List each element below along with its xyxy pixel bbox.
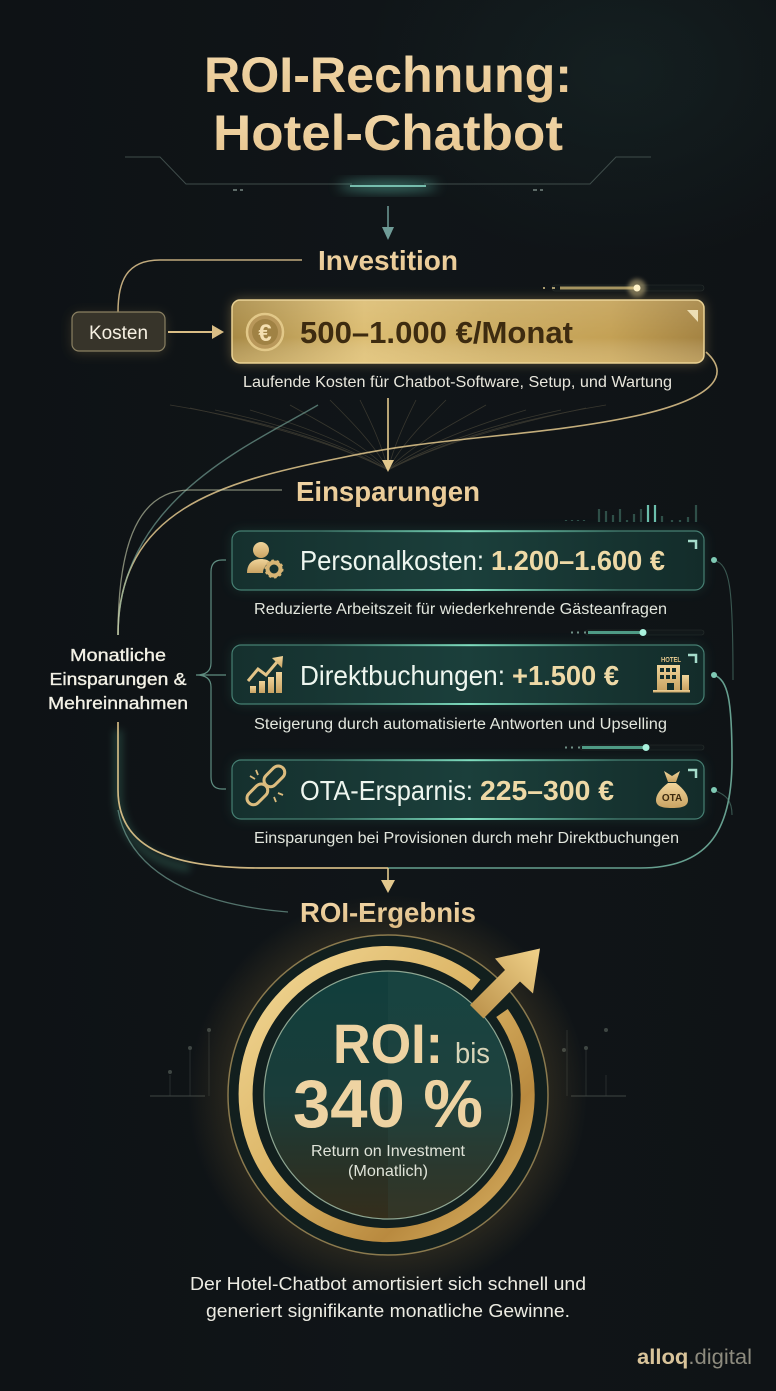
- flow curves: gold and teal: [118, 352, 733, 912]
- description: OTA: Einsparungen bei Provisionen durch mehr Direktbuchungen: [254, 830, 679, 847]
- ROI text: [293, 1012, 490, 1142]
- side label: [48, 645, 188, 713]
- description: Direktbuchungen: Steigerung durch automatisierte Antworten und Upselling: [254, 716, 667, 733]
- connector: kosten to investition heading: [118, 260, 302, 312]
- growth arrow: [470, 948, 540, 1018]
- card text: [300, 775, 614, 806]
- brand logo: alloq.digital: [637, 1346, 752, 1369]
- title: Hotel-Chatbot: [213, 105, 563, 161]
- title: [204, 47, 572, 161]
- mini bar sparkline: [566, 505, 696, 522]
- side label: Monatliche: [70, 645, 166, 665]
- card text: 225–300 €: [480, 775, 614, 806]
- title: ROI-Rechnung:: [204, 47, 572, 103]
- heading: Einsparungen: Einsparungen: [296, 476, 480, 507]
- side label: Einsparungen &: [50, 669, 187, 689]
- arrow: to ROI result: [381, 868, 395, 893]
- ROI caption: Return on Investment: [311, 1143, 466, 1160]
- card text: Direktbuchungen:: [300, 660, 505, 691]
- gold ring with gap: [246, 953, 528, 1235]
- card text: Personalkosten:: [300, 545, 484, 576]
- icon: person with gear: [247, 542, 282, 578]
- heading: Investition: Investition: [318, 245, 458, 276]
- cost description: Laufende Kosten für Chatbot-Software, Setup, und Wartung: [243, 374, 672, 391]
- ROI text: 340 %: [293, 1066, 483, 1142]
- fan of light rays: [170, 400, 606, 470]
- title divider ornament: [125, 157, 651, 191]
- arrow: investition to einsparungen: [382, 398, 394, 472]
- bracket connecting cards: [196, 560, 226, 789]
- side label: Mehreinnahmen: [48, 693, 188, 713]
- progress line: OTA: [565, 744, 704, 751]
- card text: OTA-Ersparnis:: [300, 775, 473, 806]
- panel: Direktbuchungen: [232, 644, 704, 705]
- conclusion text: Der Hotel-Chatbot amortisiert sich schnell und: [190, 1274, 586, 1294]
- arrow: title to investition: [382, 206, 394, 240]
- arrow: kosten to cost box: [168, 325, 224, 339]
- icon: money bag: OTA: [662, 793, 682, 804]
- icon: hotel: HOTEL: [661, 657, 682, 664]
- icon: euro coin: [247, 314, 283, 350]
- panel: Personalkosten: [232, 530, 704, 591]
- ROI text: ROI:: [333, 1012, 443, 1075]
- progress line: Direktbuchungen: [571, 629, 704, 636]
- icon: hotel: [653, 657, 690, 692]
- card text: [300, 660, 619, 691]
- cost value: 500–1.000 €/Monat: [300, 315, 573, 350]
- conclusion text: generiert signifikante monatliche Gewinne.: [206, 1301, 570, 1321]
- icon: euro coin: €: [258, 320, 272, 347]
- card text: +1.500 €: [512, 660, 619, 691]
- icon: money bag: [656, 771, 688, 808]
- label box: Kosten: Kosten: [89, 323, 148, 344]
- progress line: investition: [543, 279, 704, 297]
- conclusion text: [190, 1274, 586, 1321]
- description: Personalkosten: Reduzierte Arbeitszeit für wiederkehrende Gästeanfragen: [254, 601, 667, 618]
- ROI caption: [311, 1143, 466, 1180]
- card text: 1.200–1.600 €: [491, 545, 665, 576]
- connector dots: [711, 557, 717, 793]
- icon: broken chain: [244, 763, 287, 807]
- side ornaments: [150, 1028, 626, 1096]
- card text: [300, 545, 665, 576]
- panel: monthly cost: [232, 300, 704, 363]
- heading: ROI-Ergebnis: ROI-Ergebnis: [300, 897, 476, 928]
- ROI badge: [188, 895, 588, 1295]
- ROI caption: (Monatlich): [348, 1163, 428, 1180]
- icon: growth chart: [248, 656, 283, 693]
- ROI text: bis: [455, 1038, 490, 1070]
- panel: OTA-Ersparnis: [232, 759, 704, 820]
- label box: Kosten: [72, 312, 165, 353]
